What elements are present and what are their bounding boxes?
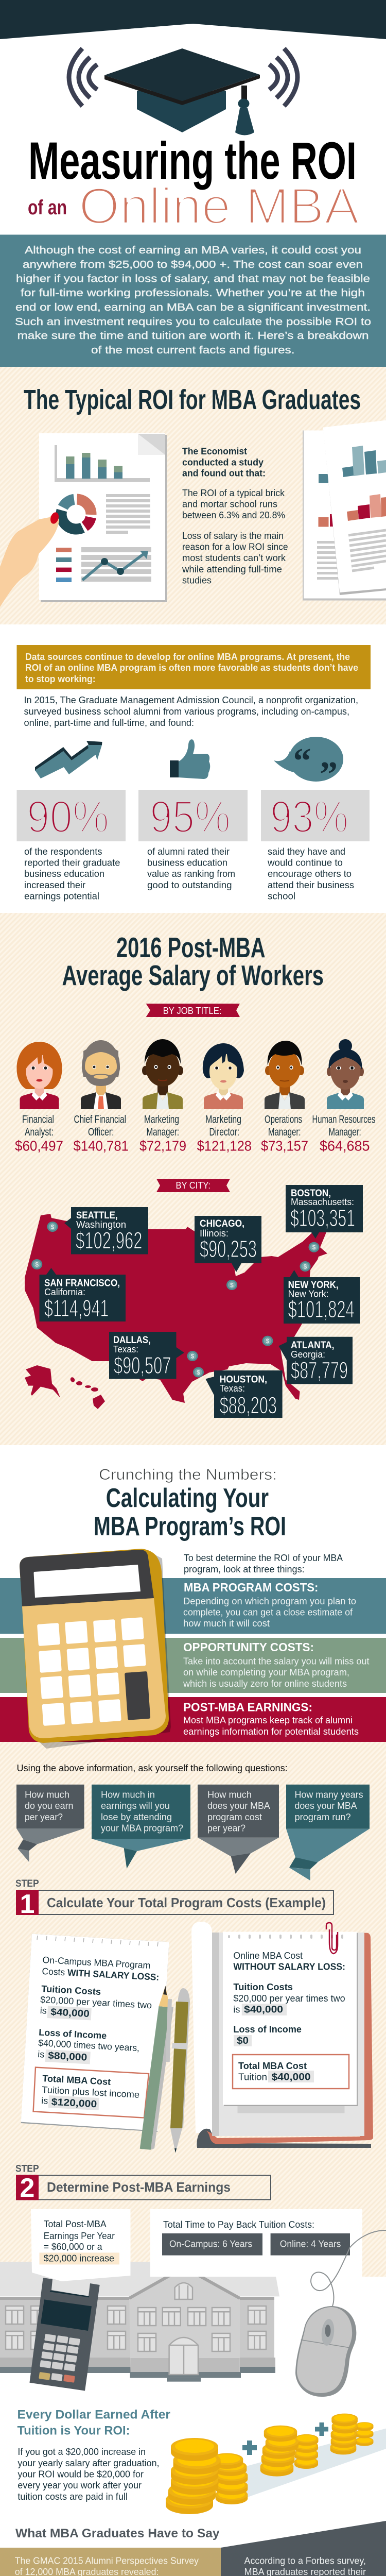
icon: thumbs up <box>170 739 210 779</box>
labels: job titles and salaries: $121,128 <box>197 1138 252 1154</box>
heading: post-MBA salaries: 2016 Post-MBA <box>116 931 266 963</box>
text: every dollar earned: every year you work after your <box>17 2480 142 2490</box>
illustration: campus building <box>0 2262 279 2382</box>
notepad: on-campus MBA cost: On-Campus MBA Program <box>42 1955 151 1971</box>
panel: opportunity costs: which is usually zero for online students <box>183 1679 347 1689</box>
panel: MBA program costs: MBA PROGRAM COSTS: <box>184 1581 318 1594</box>
avatar: operations manager <box>265 1041 305 1109</box>
illustration: pencil <box>140 1986 173 2150</box>
avatar: chief financial officer <box>81 1040 121 1109</box>
speech bubble: program cost: program cost <box>207 1812 262 1822</box>
stat: 93 percent: encourage others to <box>268 869 352 879</box>
panel: typical ROI background <box>0 367 386 624</box>
callout: Chicago <box>195 1216 261 1272</box>
notepad: on-campus MBA cost: is <box>41 2095 48 2106</box>
notepad: on-campus MBA cost <box>21 1934 169 2132</box>
text: GMAC survey intro: In 2015, The Graduate Management Admission Council, a nonprofit organization, <box>24 695 358 705</box>
panel: opportunity costs: OPPORTUNITY COSTS: <box>183 1640 314 1654</box>
callout: New York: New York: <box>288 1289 328 1299</box>
stat: 90 percent: of the respondents <box>24 846 102 857</box>
stat: 93 percent: would continue to <box>267 858 343 868</box>
stat: 90 percent: increased their <box>24 880 85 890</box>
notepad: on-campus MBA cost: $20,000 per year times two <box>40 1994 152 2010</box>
callout: Atlanta: $87,779 <box>291 1357 348 1384</box>
text: The Economist study: and found out that: <box>182 468 266 478</box>
notebook: online MBA cost: Tuition <box>238 2072 267 2082</box>
panel: total time to pay back tuition: On-Campus: 6 Years <box>169 2239 252 2249</box>
stat: 93 percent <box>261 790 370 902</box>
title: of an <box>28 196 67 219</box>
labels: job titles and salaries: Marketing <box>144 1114 179 1125</box>
speech bubble: program length: How many years <box>294 1790 363 1800</box>
callout: online MBA data sources: ROI of an online MBA program is often more favorable as students don’t have <box>25 663 358 673</box>
callout: Boston: Massachusetts: <box>291 1197 354 1207</box>
panel: post-MBA earnings receipt: = $60,000 or a <box>44 2242 102 2252</box>
ribbon: by job title <box>146 1004 240 1017</box>
heading: graduates say: What MBA Graduates Have to Say <box>15 2527 220 2540</box>
markers: salary coins on map <box>31 1222 319 1378</box>
panel: post-MBA earnings receipt: $20,000 increase <box>44 2253 114 2263</box>
illustration: calculator <box>20 1549 171 1749</box>
notepad: on-campus MBA cost: Costs WITH SALARY LOSS: <box>42 1966 160 1982</box>
heading: post-MBA salaries <box>62 931 324 991</box>
panel: post-MBA earnings: POST-MBA EARNINGS: <box>183 1700 312 1714</box>
stat: 95 percent <box>138 790 248 890</box>
labels: job titles and salaries: Officer: <box>88 1126 114 1138</box>
text: every dollar earned: your ROI would be $20,000 for <box>17 2469 144 2479</box>
callout: Seattle: Washington <box>76 1219 126 1230</box>
notebook: online MBA cost: WITHOUT SALARY LOSS: <box>233 1962 345 1972</box>
text: questions prompt: Using the above information, ask yourself the following questions: <box>16 1763 288 1773</box>
text: three things intro: To best determine the ROI of your MBA <box>184 1553 343 1563</box>
illustration: stacked reports <box>303 420 386 601</box>
panel: MBA program costs <box>0 1578 386 1634</box>
labels: job titles and salaries: $60,497 <box>15 1138 63 1154</box>
speech bubble: earnings lost: lose by attending <box>101 1812 172 1822</box>
speech bubble: earnings per year <box>16 1785 84 1862</box>
ribbon: by job title: BY JOB TITLE: <box>163 1006 222 1016</box>
speech bubble: program cost: How much <box>207 1790 252 1800</box>
panel: questions background <box>0 1742 386 2277</box>
ribbon: by city: BY CITY: <box>176 1180 210 1191</box>
title: Online MBA <box>79 177 359 234</box>
callout: Houston: HOUSTON, <box>220 1375 267 1385</box>
callout: San Francisco: California: <box>44 1287 85 1297</box>
panel: post-MBA earnings: earnings information for potential students <box>183 1726 359 1737</box>
callout: New York: $101,824 <box>288 1296 355 1323</box>
panel: total time to pay back tuition: Online: 4 Years <box>280 2239 341 2249</box>
speech bubble: earnings per year: do you earn <box>25 1801 73 1811</box>
panel: introduction: higher if you factor in loss of salary, and that may not be feasible <box>16 274 370 285</box>
step 2 heading: 2 <box>20 2173 34 2203</box>
stat: 95 percent: of alumni rated their <box>147 846 230 857</box>
callout: Houston <box>205 1370 283 1419</box>
callout: Dallas: Texas: <box>113 1344 138 1354</box>
icon: speech bubble <box>274 737 343 794</box>
notebook: online MBA cost: $40,000 <box>272 2072 311 2082</box>
callout: Houston: Texas: <box>220 1383 245 1394</box>
panel: post-MBA earnings receipt: Earnings Per Year <box>44 2231 115 2241</box>
labels: job titles and salaries: Analyst: <box>25 1126 54 1138</box>
panel: introduction: end or low end, earning an MBA can be a significant investment. <box>15 302 371 313</box>
icon: speech bubble: ” <box>320 755 338 794</box>
panel: total time to pay back tuition: Total Time to Pay Back Tuition Costs: <box>163 2219 314 2230</box>
step 2 heading <box>15 2163 271 2203</box>
notepad: on-campus MBA cost: Tuition Costs <box>41 1984 101 1997</box>
illustration: payment terminal <box>29 2278 100 2391</box>
notebook: online MBA cost: is <box>233 2005 240 2015</box>
callout: Boston: BOSTON, <box>291 1188 331 1199</box>
panel: GMAC survey <box>0 2548 221 2576</box>
labels: job titles and salaries: $73,157 <box>261 1138 308 1154</box>
text: The Economist study: Loss of salary is the main <box>182 531 284 541</box>
text: every dollar earned: Tuition is Your ROI: <box>17 2424 130 2438</box>
speech bubble: earnings per year: per year? <box>25 1812 63 1822</box>
panel: salaries background <box>0 913 386 1445</box>
text: The Economist study: reason for a low ROI since <box>182 542 288 552</box>
panel: total time to pay back tuition <box>150 2209 362 2277</box>
text: The Economist study: The Economist <box>182 446 247 456</box>
labels: job titles and salaries: Chief Financial <box>74 1114 126 1125</box>
step 2 heading: Determine Post-MBA Earnings <box>47 2179 231 2195</box>
speech bubble: earnings lost <box>92 1785 190 1869</box>
labels: job titles and salaries <box>15 1114 375 1154</box>
panel: opportunity costs: Take into account the salary you will miss out <box>183 1656 370 1666</box>
text: every dollar earned <box>17 2408 170 2502</box>
labels: job titles and salaries: Financial <box>22 1114 54 1125</box>
panel: post-MBA earnings <box>0 1697 386 1742</box>
panel: post-MBA earnings: Most MBA programs keep track of alumni <box>183 1715 353 1725</box>
panel: introduction: for full-time working professionals. Whether you’re at the high <box>21 287 365 299</box>
panel: MBA program costs: how much it will cost <box>183 1618 270 1629</box>
labels: job titles and salaries: Manager: <box>268 1126 301 1138</box>
panel: MBA program costs: complete, you can get a close estimate of <box>183 1607 353 1618</box>
illustration: pen <box>166 1988 190 2153</box>
avatar: human resources manager <box>327 1039 364 1109</box>
map: United States <box>25 1214 327 1409</box>
notepad: on-campus MBA cost: is <box>40 2005 47 2016</box>
notebook: online MBA cost: Tuition Costs <box>233 1982 293 1992</box>
illustration: coin stacks <box>166 2414 386 2514</box>
speech bubble: program length: program run? <box>294 1812 351 1822</box>
avatar: marketing director <box>203 1043 244 1109</box>
panel: introduction: Although the cost of earning an MBA varies, it could cost you <box>25 245 361 256</box>
icon: speech bubble: “ <box>293 741 311 781</box>
panel: MBA program costs: Depending on which program you plan to <box>183 1596 356 1606</box>
text: The Economist study: while attending full-time <box>182 564 282 574</box>
speech bubble: earnings per year: How much <box>25 1790 69 1800</box>
panel: Forbes survey: According to a Forbes survey, <box>244 2556 366 2566</box>
step 1 heading <box>15 1878 334 1919</box>
heading: calculating your ROI: Crunching the Numbers: <box>99 1466 277 1483</box>
speech bubble: program length: does your MBA <box>294 1801 357 1811</box>
notebook: online MBA cost: Total MBA Cost <box>238 2061 307 2071</box>
labels: job titles and salaries: $140,781 <box>73 1138 129 1154</box>
panel: GMAC survey: The GMAC 2015 Alumni Perspectives Survey <box>15 2556 199 2566</box>
callout: Seattle: $102,962 <box>76 1227 142 1254</box>
callout: San Francisco <box>39 1268 126 1321</box>
text: The Economist study: between 6.3% and 20.8% <box>182 510 285 520</box>
notepad: on-campus MBA cost: Loss of Income <box>39 2027 107 2041</box>
icon: graduation cap with signal waves <box>69 48 297 135</box>
panel: introduction: Such an investment requires you to calculate the possible ROI to <box>15 316 371 328</box>
callout: Chicago: Illinois: <box>200 1228 229 1239</box>
speech bubble: program cost: does your MBA <box>207 1801 270 1811</box>
labels: job titles and salaries: Director: <box>209 1126 239 1138</box>
panel: opportunity costs <box>0 1638 386 1693</box>
callout: New York: NEW YORK, <box>288 1280 339 1291</box>
speech bubble: program cost: per year? <box>207 1823 245 1834</box>
stat: 93 percent: school <box>268 891 295 902</box>
text: three things intro <box>184 1553 343 1574</box>
step 1 heading: STEP <box>15 1878 39 1889</box>
heading: calculating your ROI <box>94 1466 286 1541</box>
panel: post-MBA earnings receipt: Total Post-MBA <box>44 2219 107 2229</box>
callout: San Francisco: $114,941 <box>44 1295 109 1321</box>
panel: introduction: of the most current facts and figures. <box>91 345 294 356</box>
labels: job titles and salaries: Manager: <box>328 1126 361 1138</box>
text: every dollar earned: tuition costs are paid in full <box>17 2492 128 2502</box>
notebook: online MBA cost: $0 <box>237 2036 249 2046</box>
notepad: on-campus MBA cost: Tuition plus lost income <box>42 2084 140 2100</box>
stat: 93 percent: attend their business <box>268 880 354 890</box>
step 1 heading: Calculate Your Total Program Costs (Example) <box>47 1895 326 1910</box>
labels: job titles and salaries: $72,179 <box>139 1138 186 1154</box>
speech bubble: program cost <box>198 1785 279 1874</box>
callout: Chicago: CHICAGO, <box>200 1218 244 1229</box>
text: GMAC survey intro <box>24 695 358 728</box>
text: The Economist study: conducted a study <box>182 457 264 468</box>
white band under payback boxes <box>0 2262 362 2277</box>
step 2 heading: STEP <box>15 2163 39 2174</box>
stat: 95 percent: good to outstanding <box>147 880 232 890</box>
text: GMAC survey intro: online, part-time and full-time, and found: <box>24 718 194 728</box>
notepad: on-campus MBA cost: is <box>38 2049 45 2060</box>
avatar: financial analyst <box>16 1042 62 1109</box>
notebook: online MBA cost <box>191 1922 373 2148</box>
text: GMAC survey intro: surveyed business school alumni from various programs, including on-campus, <box>24 706 349 717</box>
header band <box>0 0 386 39</box>
notebook: online MBA cost: Online MBA Cost <box>233 1951 303 1961</box>
speech bubble: earnings lost: your MBA program? <box>101 1823 183 1834</box>
callout: Dallas: $90,507 <box>114 1352 171 1379</box>
text: The Economist study: and mortar school runs <box>182 499 277 509</box>
panel: introduction: anywhere from $25,000 to $94,000 +. The cost can soar even <box>23 259 363 270</box>
text: every dollar earned: If you got a $20,000 increase in <box>17 2447 146 2457</box>
callout: Seattle <box>64 1207 148 1254</box>
callout: Dallas <box>109 1332 184 1379</box>
title <box>28 131 359 234</box>
callout: Atlanta <box>278 1337 353 1384</box>
step 1 heading: 1 <box>20 1889 34 1919</box>
notepad: on-campus MBA cost: $120,000 <box>51 2097 97 2110</box>
text: The Economist study <box>182 446 288 585</box>
notepad: on-campus MBA cost: $40,000 <box>50 2007 90 2020</box>
speech bubble: earnings lost: earnings will you <box>101 1801 170 1811</box>
callout: New York <box>284 1270 360 1324</box>
panel: post-MBA earnings receipt <box>31 2209 131 2281</box>
text: every dollar earned: your yearly salary after graduation, <box>17 2458 160 2468</box>
ribbon: by city <box>156 1179 230 1192</box>
labels: job titles and salaries: $64,685 <box>320 1138 370 1154</box>
labels: job titles and salaries: Manager: <box>147 1126 179 1138</box>
stat: 93 percent: said they have and <box>268 846 345 857</box>
notebook: online MBA cost: $40,000 <box>244 2005 283 2015</box>
notepad: on-campus MBA cost: $40,000 times two years, <box>38 2038 140 2053</box>
stat: 95 percent: business education <box>147 858 227 868</box>
speech bubble: earnings lost: How much in <box>101 1790 155 1800</box>
callout: online MBA data sources: Data sources continue to develop for online MBA programs. At present, the <box>25 652 350 662</box>
heading: calculating your ROI: MBA Program’s ROI <box>94 1512 286 1541</box>
notepad: on-campus MBA cost: Total MBA Cost <box>42 2073 111 2087</box>
notebook: online MBA cost: Loss of Income <box>233 2024 302 2035</box>
callout: Houston: $88,203 <box>220 1392 277 1419</box>
panel: introduction <box>0 235 386 367</box>
panel: Forbes survey <box>221 2521 386 2576</box>
illustration: computer mouse <box>295 2230 386 2397</box>
callout: online MBA data sources: to stop working: <box>25 674 96 684</box>
stat: 93 percent: 93% <box>270 791 348 842</box>
notepad: on-campus MBA cost: $80,000 <box>48 2050 87 2063</box>
callout: Atlanta: ATLANTA, <box>291 1340 335 1351</box>
stat: 95 percent: value as ranking from <box>147 869 235 879</box>
stat: 90 percent: 90% <box>27 791 109 842</box>
callout: Chicago: $90,253 <box>200 1235 257 1262</box>
icon: rising arrow <box>35 741 102 778</box>
labels: job titles and salaries: Operations <box>265 1114 302 1125</box>
illustration: report held by hand <box>0 433 167 607</box>
stat: 90 percent: earnings potential <box>24 891 99 902</box>
labels: job titles and salaries: Marketing <box>205 1114 241 1125</box>
callout: Atlanta: Georgia: <box>291 1349 325 1360</box>
callout: online MBA data sources <box>16 645 371 689</box>
stat: 95 percent: 95% <box>150 791 231 842</box>
panel: opportunity costs: on while completing your MBA program, <box>183 1667 349 1677</box>
callout: Boston <box>286 1185 363 1239</box>
callout: Dallas: DALLAS, <box>113 1335 151 1346</box>
avatar: marketing manager <box>142 1039 183 1109</box>
speech bubble: program length <box>286 1785 370 1880</box>
text: three things intro: program, look at three things: <box>184 1564 305 1574</box>
stat: 90 percent <box>16 790 126 902</box>
stat: 90 percent: reported their graduate <box>24 858 120 868</box>
text: every dollar earned: Every Dollar Earned After <box>17 2408 170 2422</box>
notebook: online MBA cost: $20,000 per year times two <box>233 1993 345 2004</box>
text: The Economist study: most students can’t work <box>182 553 286 563</box>
text: The Economist study: The ROI of a typical brick <box>182 488 285 498</box>
callout: Seattle: SEATTLE, <box>76 1210 118 1221</box>
panel: introduction: make sure the time and tuition are worth it. Here’s a breakdown <box>17 330 369 342</box>
stat: 90 percent: business education <box>24 869 104 879</box>
heading: calculating your ROI: Calculating Your <box>106 1483 269 1513</box>
callout: San Francisco: SAN FRANCISCO, <box>44 1278 120 1289</box>
text: The Economist study: studies <box>182 575 212 585</box>
